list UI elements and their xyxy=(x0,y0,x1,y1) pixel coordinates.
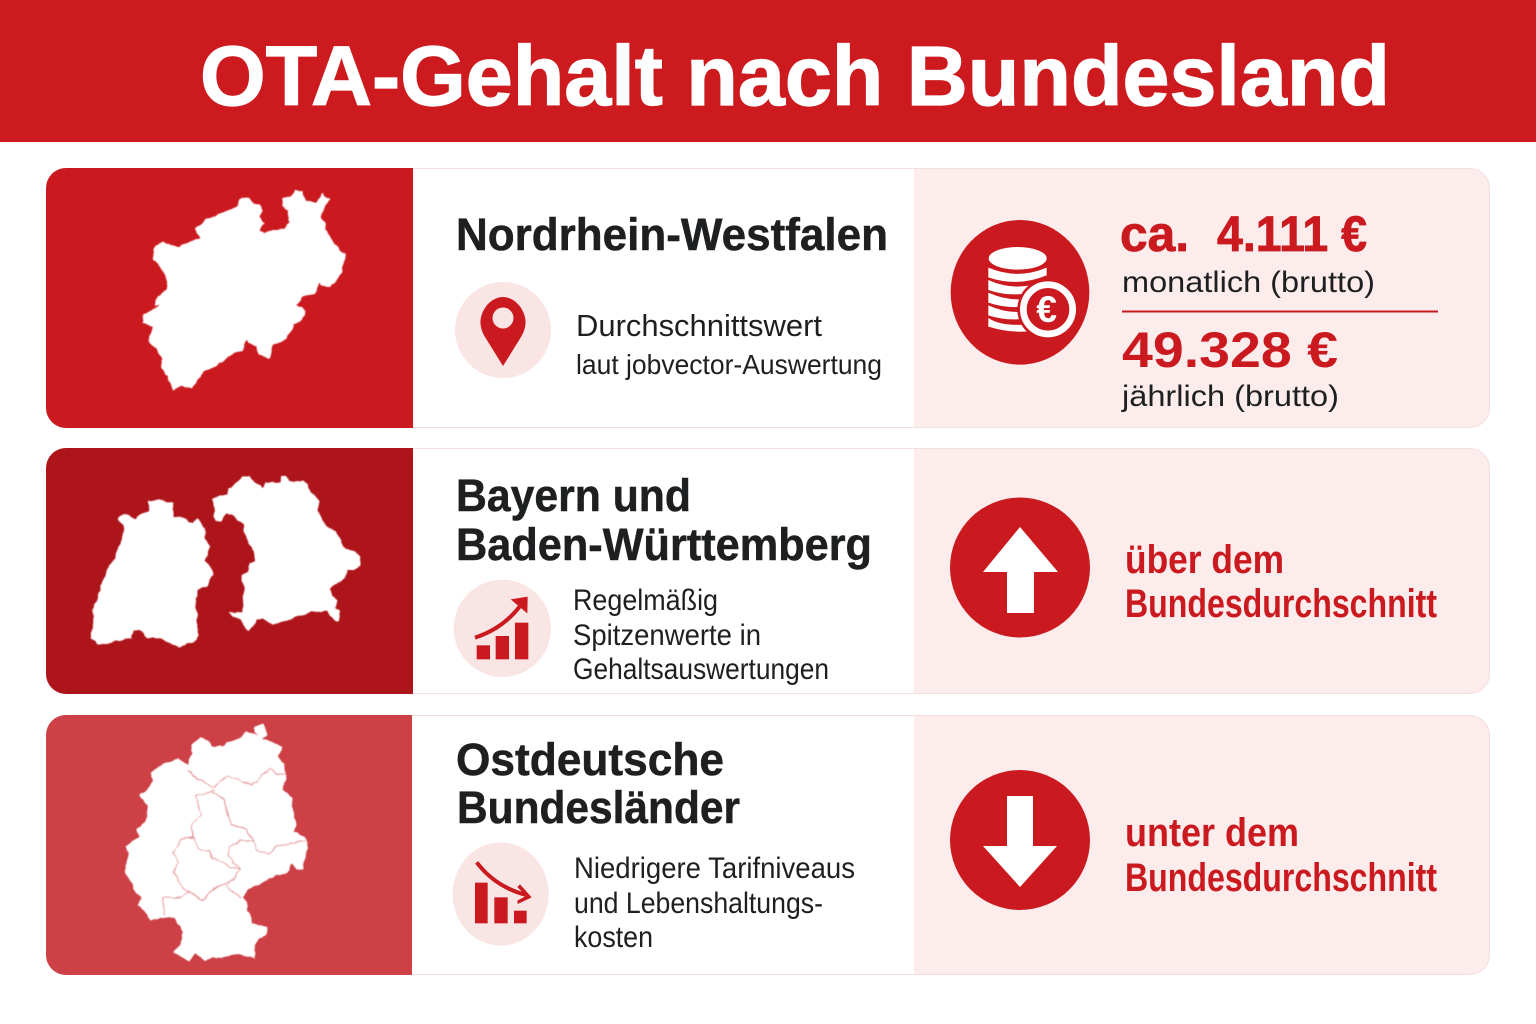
map: Baden-Württemberg and Bayern xyxy=(91,476,360,647)
text: Niedrigere Tarifniveaus xyxy=(574,852,855,954)
panel: Bayern und Baden-Württemberg xyxy=(46,448,1490,694)
yearly salary: 49.328 € xyxy=(1122,322,1338,378)
text: Regelmäßig Spitzenwerte: Gehaltsauswertungen xyxy=(573,653,829,686)
monthly salary xyxy=(1120,206,1375,299)
monthly salary: monatlich (brutto) xyxy=(1122,266,1375,299)
heading: Bayern und Baden-Württemberg xyxy=(456,470,872,570)
heading: Nordrhein-Westfalen: Nordrhein-Westfalen xyxy=(456,209,888,260)
heading: Bayern und Baden-Württemberg: Bayern und xyxy=(456,470,691,521)
text: Regelmäßig Spitzenwerte: Spitzenwerte in xyxy=(573,619,761,652)
text: über dem Bundesdurchschnitt: Bundesdurchschnitt xyxy=(1125,582,1437,626)
text: Niedrigere Tarifniveaus: Niedrigere Tarifniveaus xyxy=(574,852,855,885)
icon: coins xyxy=(951,220,1089,365)
header banner xyxy=(0,0,1536,142)
heading: Ostdeutsche Bundesländer: Bundesländer xyxy=(457,782,740,833)
heading: Ostdeutsche Bundesländer: Ostdeutsche xyxy=(456,734,724,785)
icon: falling chart xyxy=(453,842,549,946)
icon: rising chart xyxy=(454,580,551,677)
text: über dem Bundesdurchschnitt: über dem xyxy=(1125,538,1284,582)
map: Nordrhein-Westfalen xyxy=(143,192,345,389)
icon: down arrow xyxy=(950,770,1090,910)
text: Regelmäßig Spitzenwerte xyxy=(573,584,829,686)
text: Regelmäßig Spitzenwerte: Regelmäßig xyxy=(573,584,718,617)
text: unter dem Bundesdurchschnitt: Bundesdurchschnitt xyxy=(1125,856,1437,900)
yearly salary xyxy=(1121,322,1339,413)
heading: Ostdeutsche Bundesländer xyxy=(456,734,740,833)
text: unter dem Bundesdurchschnitt xyxy=(1125,811,1437,900)
title: OTA-Gehalt nach Bundesland xyxy=(200,29,1390,123)
panel: Ostdeutsche Bundesländer xyxy=(46,715,1490,975)
monthly salary: 4.111 € xyxy=(1217,206,1367,262)
map: Germany with state borders xyxy=(126,723,309,961)
icon: up arrow xyxy=(950,498,1090,638)
icon: coins: € xyxy=(1036,288,1057,330)
yearly salary: jährlich (brutto) xyxy=(1121,380,1339,413)
heading: Bayern und Baden-Württemberg: Baden-Württemberg xyxy=(456,519,872,570)
text: über dem Bundesdurchschnitt xyxy=(1125,538,1437,626)
text: Niedrigere Tarifniveaus: kosten xyxy=(574,921,653,954)
text: Durchschnittswert xyxy=(576,308,882,380)
text: Durchschnittswert: Durchschnittswert xyxy=(576,308,822,343)
text: Durchschnittswert: laut jobvector-Auswertung xyxy=(576,349,882,380)
monthly salary: ca. xyxy=(1120,206,1189,262)
icon: location pin xyxy=(455,282,551,378)
text: Niedrigere Tarifniveaus: und Lebenshaltungs- xyxy=(574,887,823,920)
panel: Nordrhein-Westfalen xyxy=(46,168,1490,428)
text: unter dem Bundesdurchschnitt: unter dem xyxy=(1125,811,1299,855)
